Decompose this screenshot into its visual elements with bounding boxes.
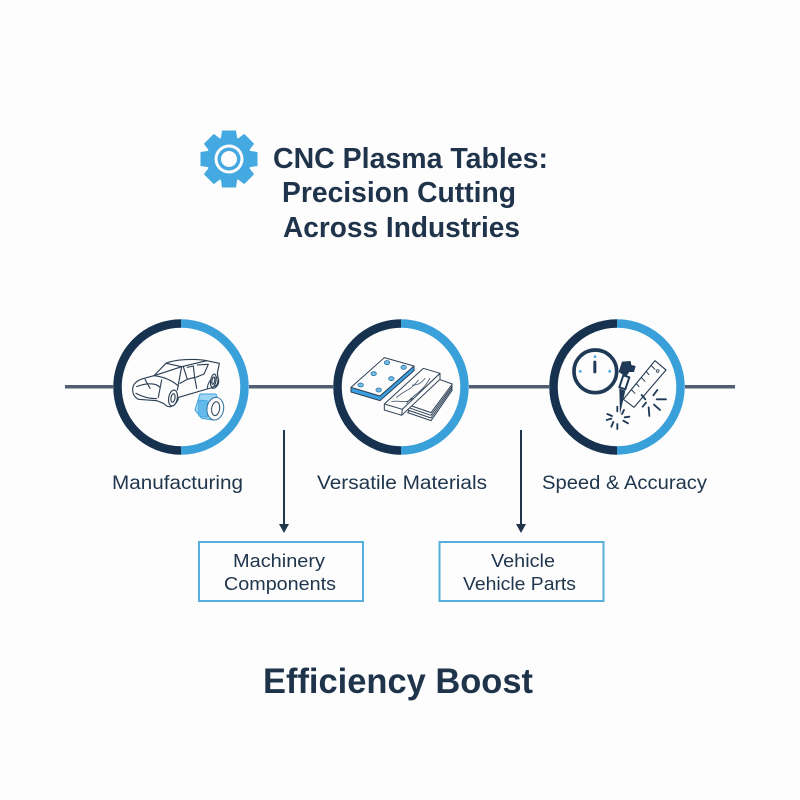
label: speed and accuracy: Speed & Accuracy (542, 473, 708, 494)
ring: speed and accuracy (549, 319, 685, 455)
panel: versatile materials (317, 319, 487, 494)
box: vehicle parts: Vehicle (491, 550, 555, 571)
icon: gauge, torch, ruler and sparks (574, 350, 666, 429)
label: manufacturing: Manufacturing (112, 473, 243, 494)
panel: manufacturing (112, 319, 249, 494)
title: CNC Plasma Tables: (273, 143, 548, 175)
ring: versatile materials (333, 319, 469, 455)
panel: speed and accuracy (542, 319, 708, 494)
box: machinery components (199, 542, 363, 601)
icon: plate, wood and sheets (351, 358, 452, 421)
icon: gear (200, 130, 258, 188)
box: machinery components: Machinery (233, 550, 326, 571)
box: machinery components: Components (224, 573, 336, 594)
title: Precision Cutting (282, 177, 516, 209)
box: vehicle parts (440, 542, 604, 601)
arrow: to machinery components (279, 430, 289, 533)
title: Across Industries (283, 212, 520, 244)
box: vehicle parts: Vehicle Parts (463, 573, 576, 594)
icon: car and bearing (133, 359, 225, 421)
label: versatile materials: Versatile Materials (317, 473, 487, 494)
title (273, 143, 548, 244)
arrow: to vehicle parts (516, 430, 526, 533)
timeline line (65, 385, 735, 388)
footer heading: Efficiency Boost (263, 662, 533, 701)
ring: manufacturing (113, 319, 249, 455)
